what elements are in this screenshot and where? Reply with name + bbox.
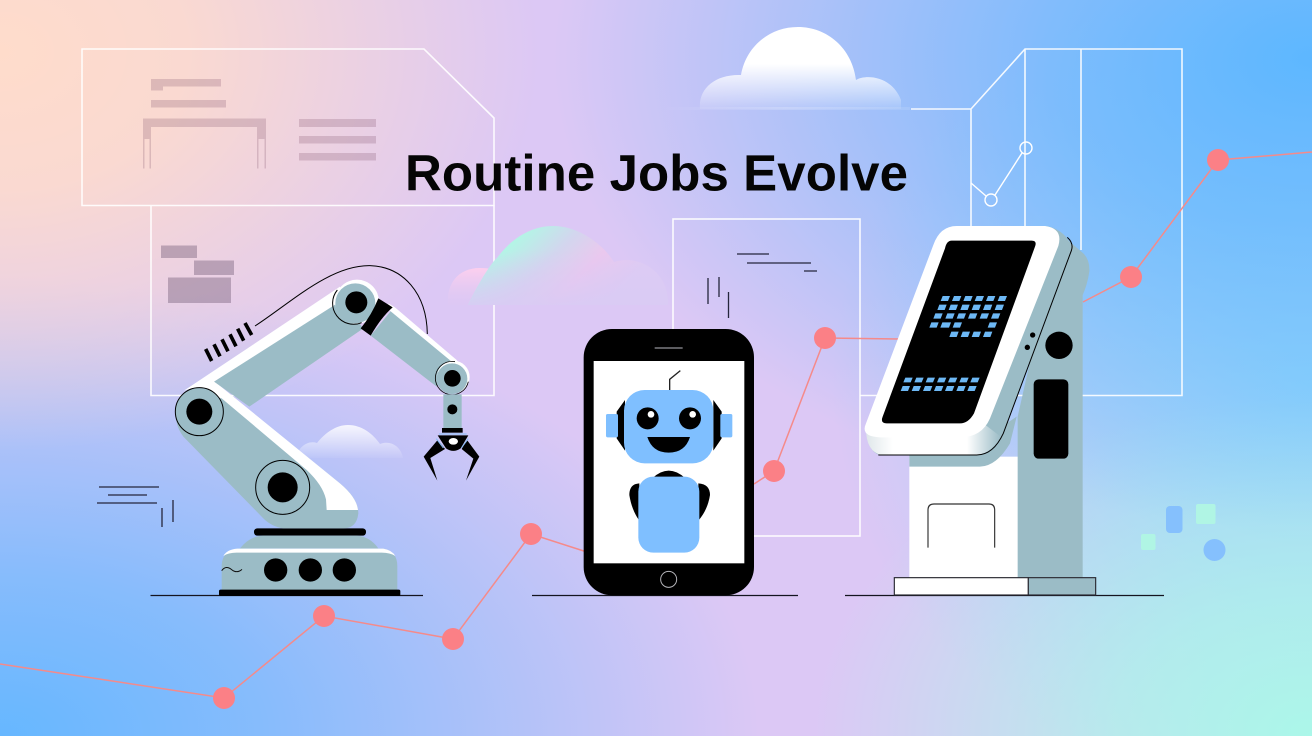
robot arm — [175, 266, 479, 596]
arm hatch marks — [206, 323, 252, 361]
cloud: small behind arm — [296, 425, 403, 458]
title: Routine Jobs Evolve — [405, 144, 908, 202]
lower arm — [176, 381, 358, 528]
ground line: phone — [532, 594, 798, 596]
wrist joint — [435, 361, 470, 429]
kiosk screen frame — [865, 226, 1059, 437]
screen pixel tiles — [901, 296, 1007, 391]
gripper — [424, 428, 479, 481]
panel: centre wireframe — [673, 219, 860, 536]
kiosk edge line — [878, 237, 1072, 455]
robot base — [219, 528, 400, 596]
kiosk screen underside — [866, 423, 1001, 455]
cloud: white top — [700, 27, 901, 109]
phone screen — [594, 361, 744, 563]
kiosk controls — [1025, 332, 1073, 459]
left motion lines — [97, 487, 173, 527]
kiosk body — [909, 230, 1089, 578]
phone body — [584, 329, 754, 595]
kiosk screen — [882, 241, 1036, 423]
forearm — [371, 303, 467, 387]
panel: top-left wireframe — [82, 49, 494, 206]
white mini line chart — [971, 142, 1032, 206]
home button — [661, 571, 677, 587]
kiosk — [865, 226, 1096, 595]
robot character — [606, 371, 732, 553]
ground line: robot — [150, 594, 423, 596]
kiosk base — [894, 578, 1096, 595]
kiosk screen side — [866, 226, 1072, 455]
speaker — [655, 347, 683, 349]
cable — [255, 266, 427, 334]
ground line: kiosk — [845, 594, 1164, 596]
panel: mid-left wireframe — [151, 206, 494, 396]
mid-left placeholder bars — [161, 246, 234, 303]
kiosk door outline — [928, 504, 995, 548]
cloud: pastel centre — [448, 226, 668, 305]
elbow joint — [333, 280, 393, 336]
centre tick lines — [708, 254, 817, 318]
cloud base strip — [662, 107, 910, 110]
top-left placeholder bars — [143, 79, 376, 168]
panel: right wireframe — [860, 49, 1182, 396]
red line chart — [0, 149, 1312, 709]
phone — [584, 329, 754, 595]
upper arm — [175, 287, 363, 436]
decorative shapes — [1141, 504, 1226, 561]
